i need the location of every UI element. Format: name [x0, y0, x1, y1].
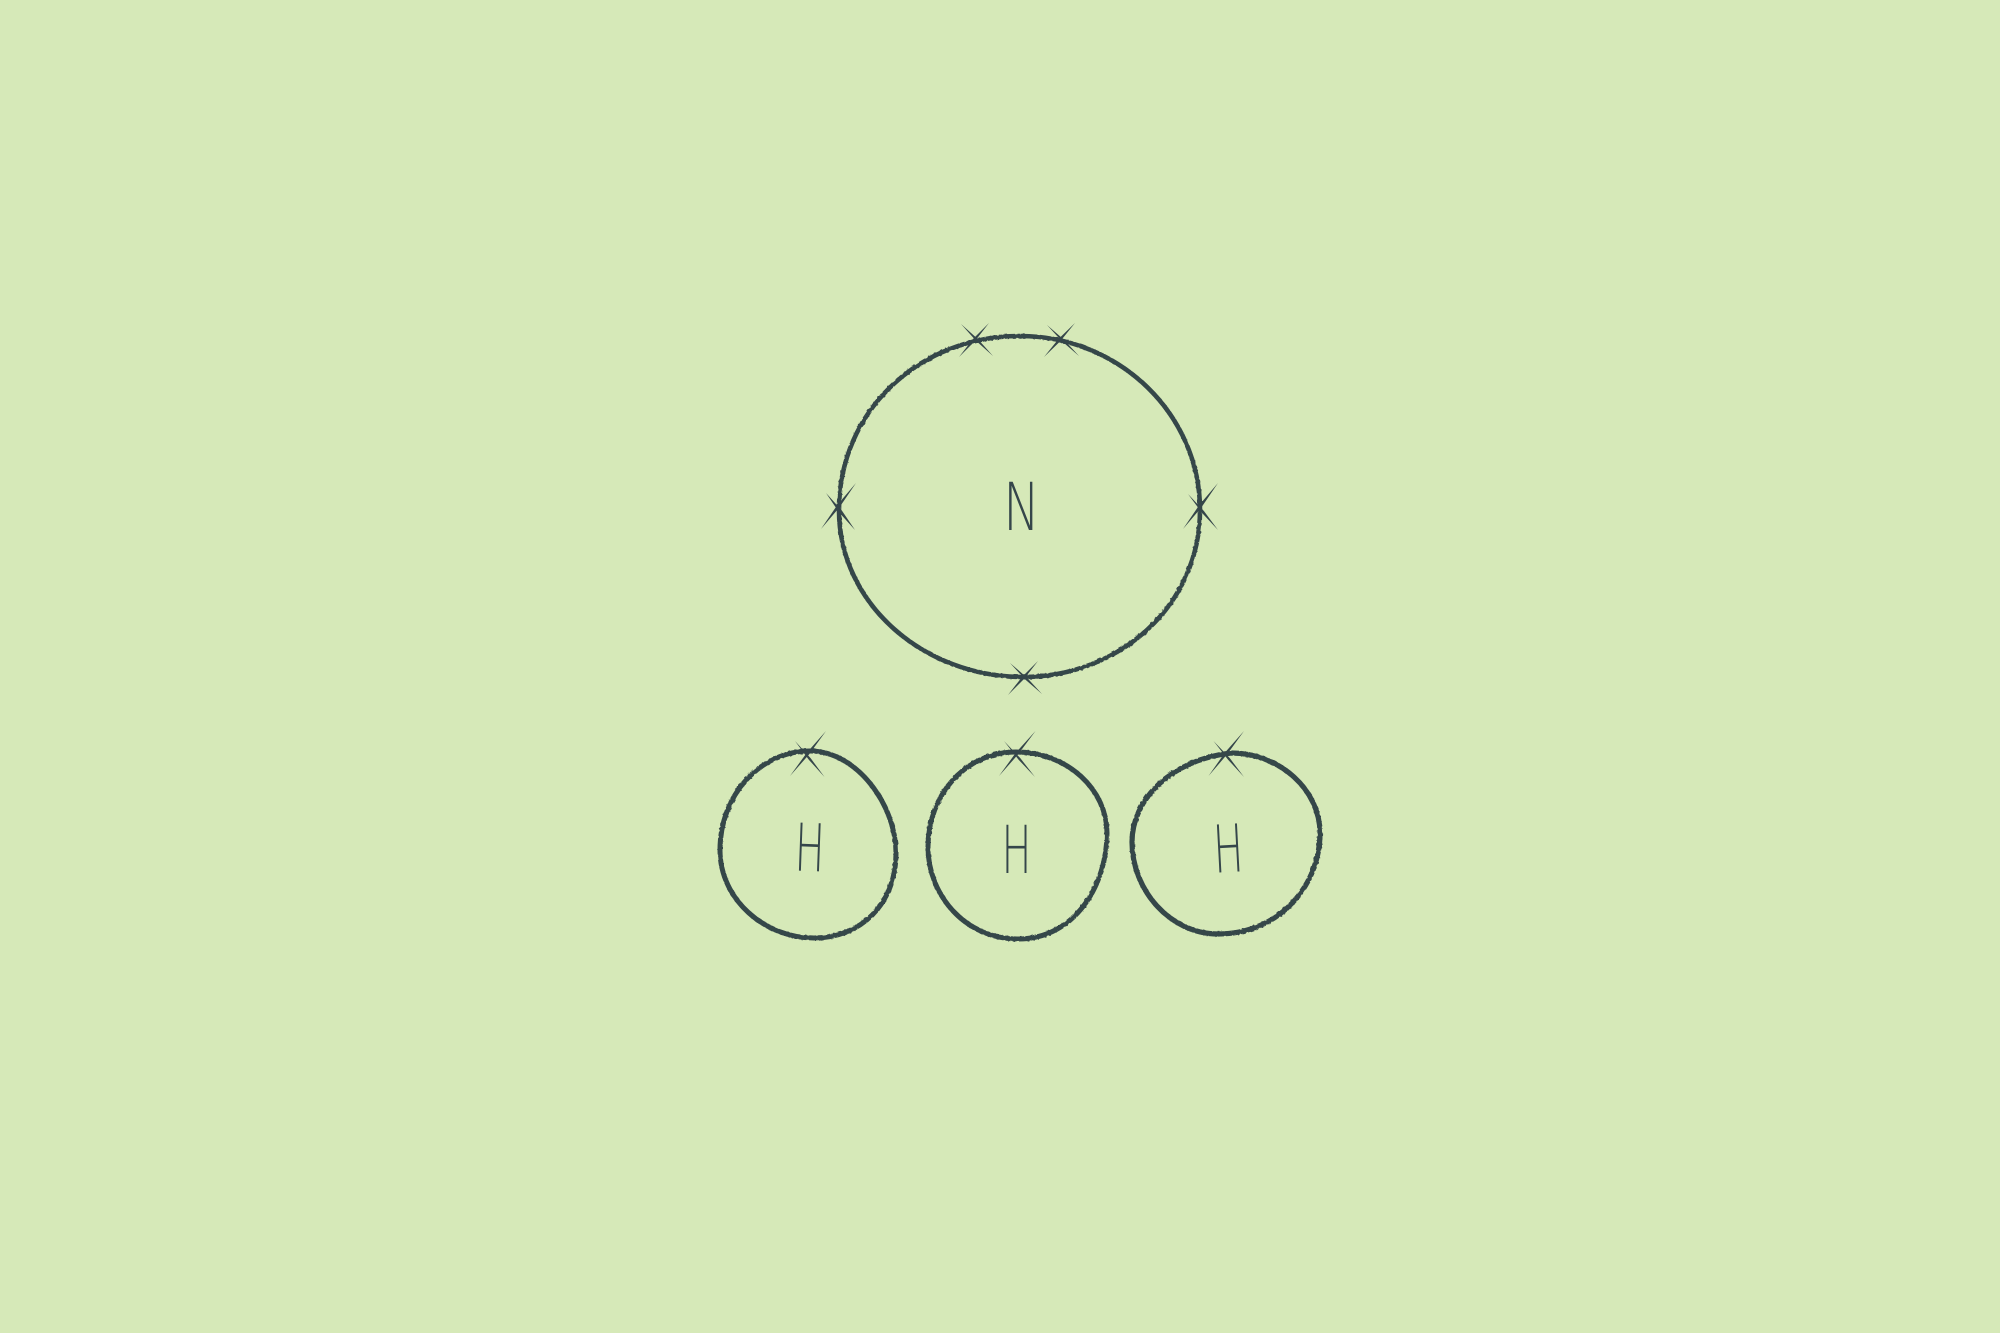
- hydrogen electron cross: [790, 731, 826, 777]
- hydrogen shell circle: [1132, 753, 1320, 934]
- nitrogen shell circle: [839, 336, 1200, 677]
- nitrogen electron crosses: [821, 323, 1218, 695]
- atom: hydrogen centre: [928, 731, 1107, 939]
- hydrogen shell circle: [720, 751, 896, 938]
- atom: hydrogen right: [1132, 731, 1320, 934]
- atom: hydrogen left: [720, 731, 896, 938]
- hydrogen electron cross: [999, 731, 1036, 777]
- hydrogen symbol: H: [1211, 809, 1245, 889]
- hydrogen shell circle: [928, 752, 1107, 939]
- nitrogen symbol: N: [1003, 469, 1040, 546]
- atom: nitrogen: [821, 323, 1218, 695]
- hydrogen electron cross: [1208, 731, 1244, 777]
- hydrogen symbol: H: [794, 809, 826, 887]
- hydrogen symbol: H: [1002, 811, 1031, 889]
